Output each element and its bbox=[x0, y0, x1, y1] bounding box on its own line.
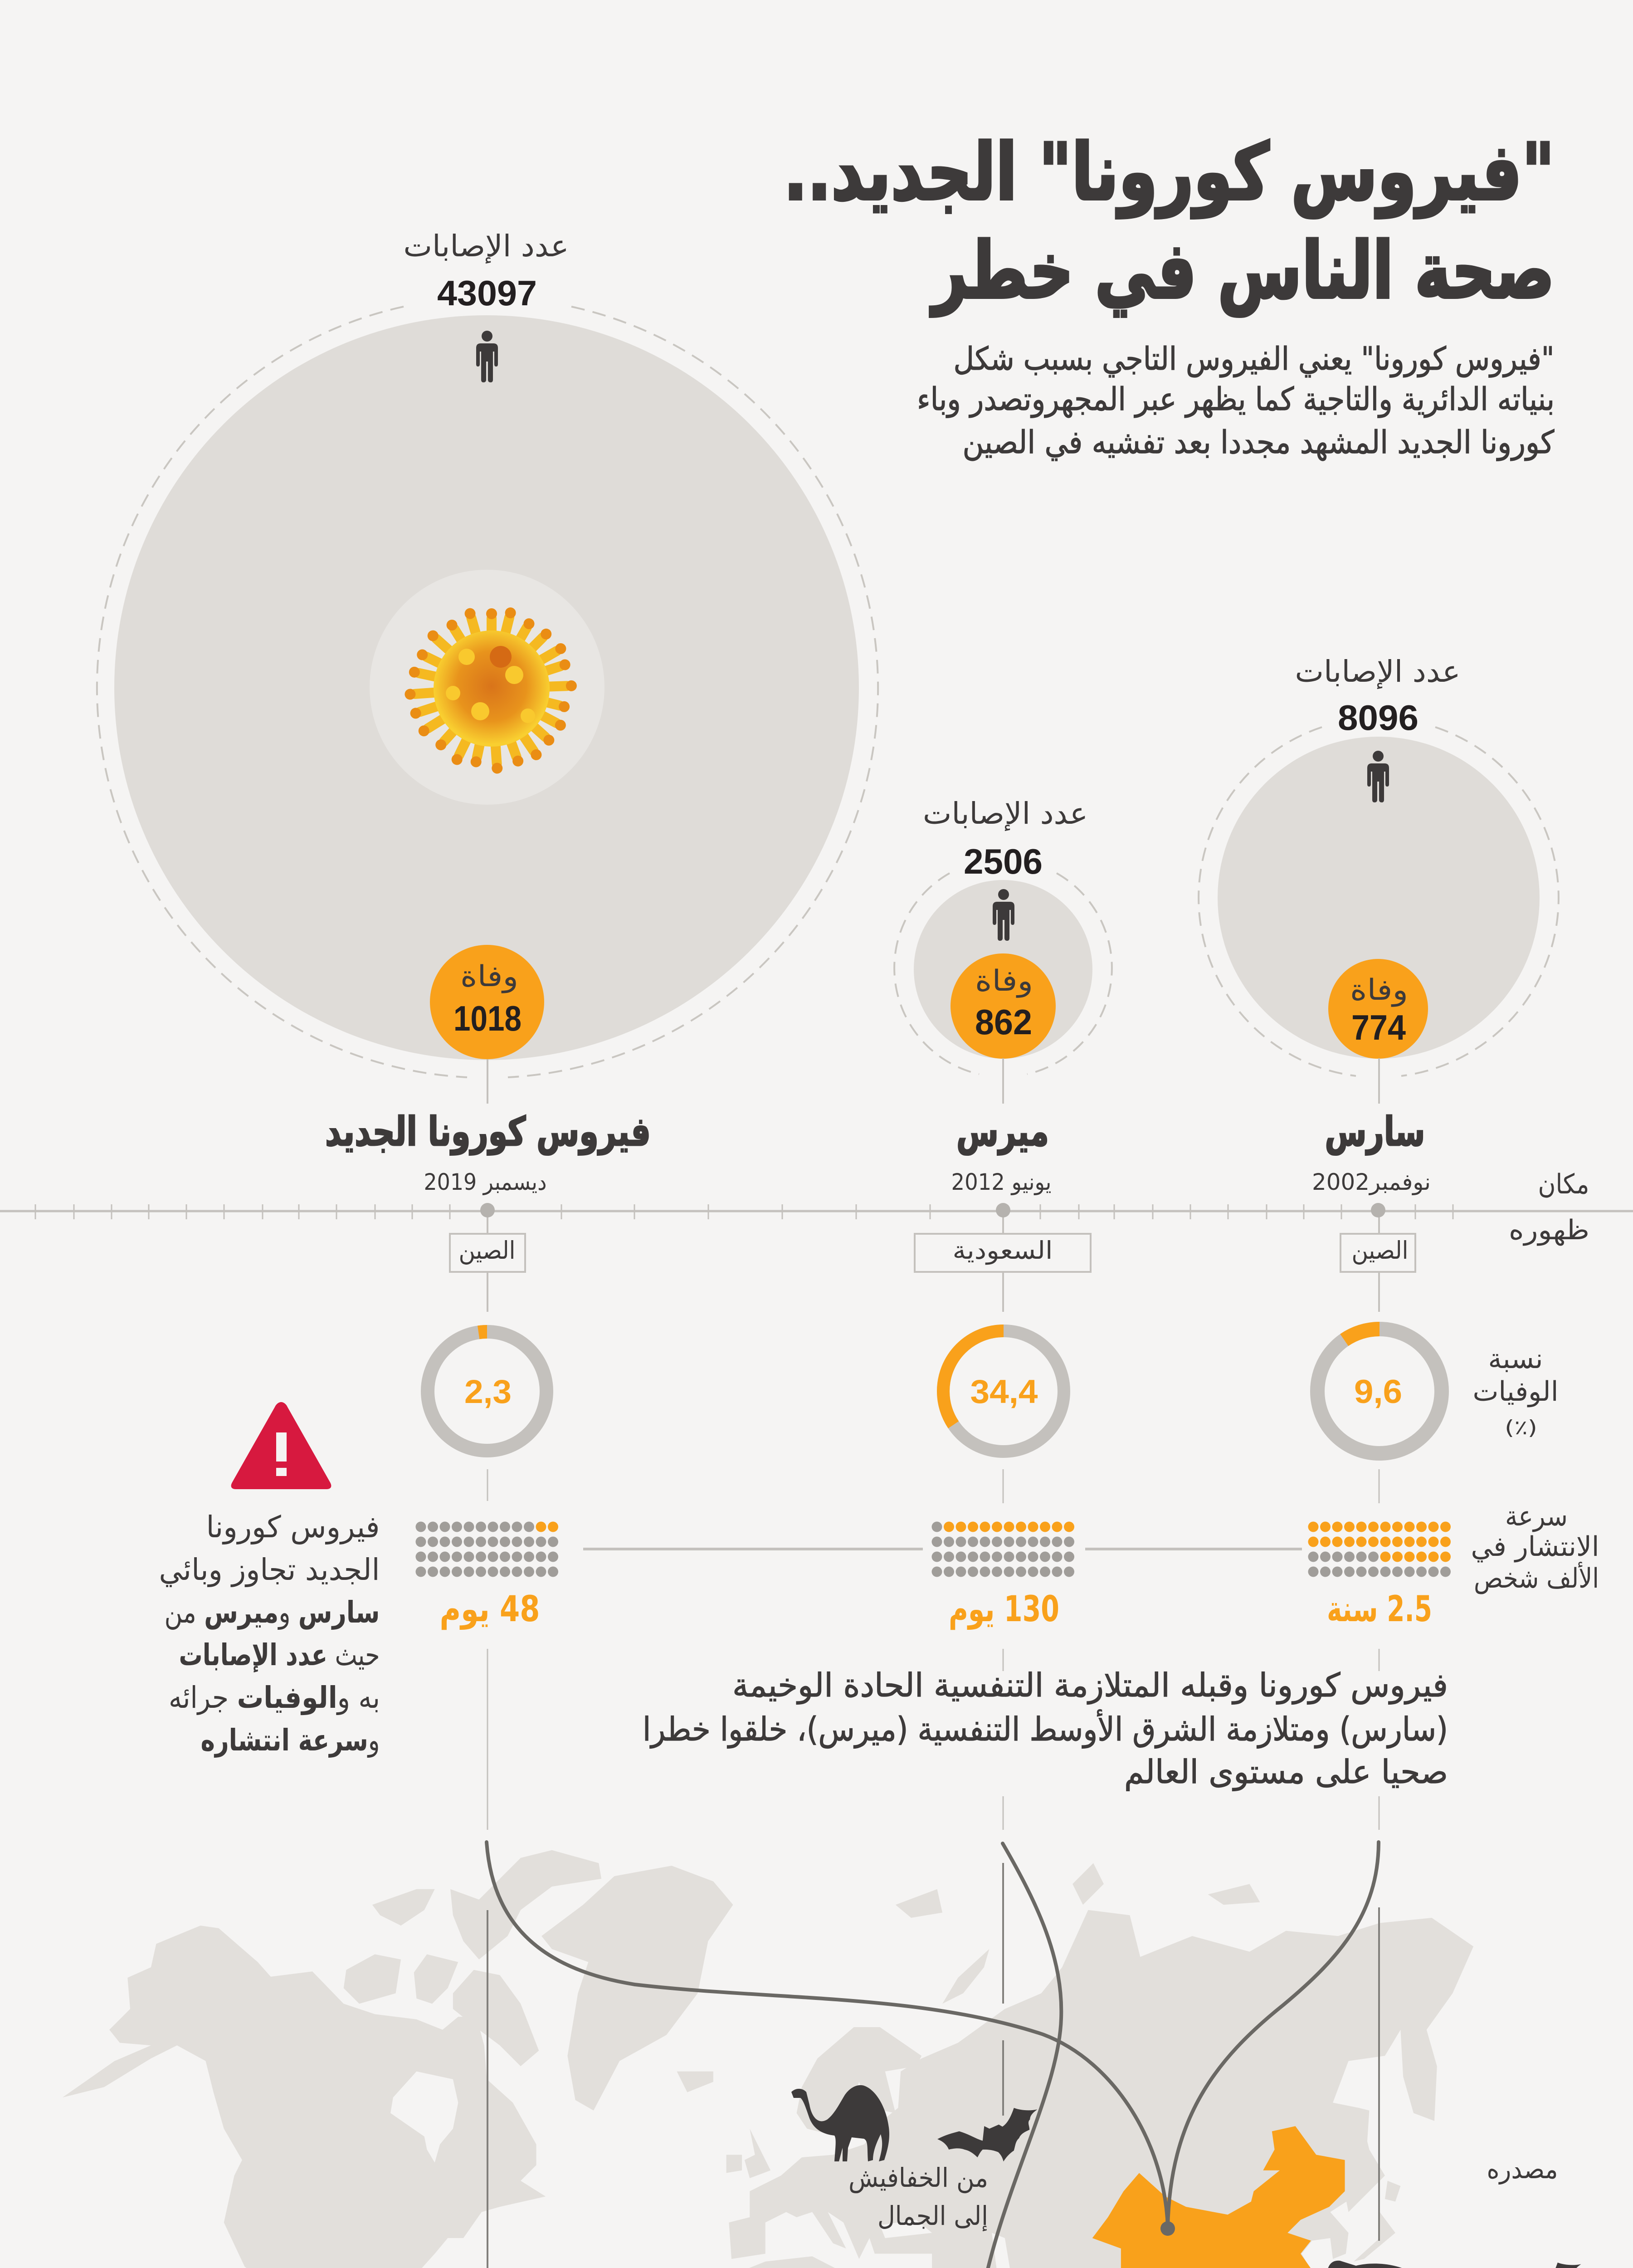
vertical guide lines over map bbox=[487, 1863, 1379, 2268]
number: infections: 2506 bbox=[964, 841, 1043, 881]
virus names: سارس bbox=[1325, 1108, 1425, 1155]
label: bats to camels: إلى الجمال bbox=[877, 2200, 988, 2232]
warning text: سارس وميرس من bbox=[164, 1595, 380, 1630]
icon: camel bbox=[791, 2085, 889, 2161]
icon: person bbox=[1367, 751, 1389, 802]
main paragraph bbox=[643, 1666, 1448, 1791]
infected area circle bbox=[114, 315, 859, 1060]
row label: fatality rate: (٪) bbox=[1505, 1416, 1537, 1439]
map: North America bbox=[63, 1926, 546, 2268]
country box: Saudi Arabia: السعودية bbox=[952, 1236, 1053, 1265]
infected area circle bbox=[1218, 737, 1540, 1059]
country box: China (new coronavirus) bbox=[450, 1234, 525, 1272]
label: bats to camels bbox=[848, 2162, 988, 2232]
number: infections: 43097 bbox=[437, 273, 537, 313]
map: Iceland and Caribbean bbox=[388, 2072, 713, 2268]
map: inland waters bbox=[390, 2072, 1010, 2268]
donut: fatality 34,4 bbox=[943, 1331, 1064, 1452]
warning text: فيروس كورونا bbox=[206, 1510, 380, 1545]
spread speed values: 130 يوم bbox=[949, 1589, 1059, 1630]
label: infections: عدد الإصابات bbox=[1295, 654, 1460, 689]
label: infections: عدد الإصابات bbox=[404, 229, 569, 264]
warning text: به والوفيات جرائه bbox=[169, 1680, 380, 1716]
intro paragraph: بنياته الدائرية والتاجية كما يظهر عبر المجهروتصدر وباء bbox=[917, 381, 1555, 418]
country box: China (SARS): الصين bbox=[1351, 1236, 1409, 1265]
main paragraph: صحيا على مستوى العالم bbox=[1124, 1753, 1448, 1791]
spread speed values bbox=[440, 1589, 1432, 1630]
deaths badge: 774 bbox=[1351, 1007, 1406, 1047]
row label: spread speed: سرعة bbox=[1505, 1501, 1568, 1532]
inner light circle bbox=[370, 570, 604, 805]
map: Greenland bbox=[541, 1866, 733, 2111]
virus names: ميرس bbox=[956, 1108, 1049, 1155]
world map bbox=[63, 1850, 1562, 2268]
map: Africa bbox=[692, 2256, 1002, 2268]
dot grid: MERS bbox=[931, 1521, 1074, 1577]
row label: place of emergence bbox=[1509, 1168, 1589, 1246]
map: Japan and Sakhalin bbox=[1354, 2108, 1400, 2262]
dates: ديسمبر 2019 bbox=[424, 1169, 547, 1195]
curve: new coronavirus to China bbox=[487, 1842, 1168, 2228]
icon: warning triangle bbox=[231, 1402, 331, 1489]
map: northern islands bbox=[896, 1863, 1260, 2004]
row label: spread speed: الألف شخص bbox=[1474, 1562, 1599, 1594]
panel: SARS circle bbox=[1199, 654, 1559, 1076]
dashed ring bbox=[1199, 727, 1559, 1076]
deaths badge: وفاة bbox=[460, 960, 518, 993]
number: infections: 8096 bbox=[1338, 698, 1419, 738]
dates bbox=[424, 1169, 1431, 1195]
map: Scandinavia bbox=[797, 2027, 921, 2134]
icon: person bbox=[476, 331, 498, 382]
panel: MERS circle bbox=[894, 796, 1112, 1074]
row label: fatality rate bbox=[1473, 1343, 1558, 1439]
donut: fatality 2,3 bbox=[428, 1332, 546, 1451]
map: Arctic islands bbox=[344, 1850, 601, 2066]
map: China highlighted bbox=[1092, 2126, 1345, 2268]
timeline bbox=[0, 1203, 1633, 1219]
icon: bat (camel source) bbox=[937, 2108, 1037, 2161]
deaths badge bbox=[430, 945, 544, 1059]
row label: place of emergence: مكان bbox=[1538, 1168, 1589, 1200]
deaths badge: 862 bbox=[975, 1002, 1032, 1042]
label: source row: مصدره bbox=[1487, 2154, 1558, 2185]
donut: fatality 9,6: 9,6 bbox=[1354, 1374, 1402, 1410]
intro paragraph: كورونا الجديد المشهد مجددا بعد تفشيه في الصين bbox=[962, 424, 1555, 461]
deaths badge: وفاة bbox=[975, 964, 1033, 998]
dates: يونيو 2012 bbox=[951, 1169, 1051, 1195]
title bbox=[784, 127, 1555, 317]
deaths badge: 1018 bbox=[453, 998, 522, 1038]
country box: Saudi Arabia bbox=[915, 1234, 1091, 1272]
map: British Isles bbox=[726, 2129, 770, 2178]
map: Eurasia bbox=[729, 1910, 1473, 2268]
label: infections: عدد الإصابات bbox=[923, 796, 1088, 831]
donut: fatality 34,4: 34,4 bbox=[970, 1374, 1038, 1410]
dates: نوفمبر2002 bbox=[1312, 1169, 1431, 1195]
label: bats to camels: من الخفافيش bbox=[848, 2162, 988, 2194]
warning text: الجديد تجاوز وبائي bbox=[159, 1552, 380, 1587]
row label: spread speed bbox=[1471, 1501, 1599, 1594]
country box: China (new coronavirus): الصين bbox=[459, 1236, 515, 1265]
warning text bbox=[159, 1510, 380, 1758]
virus names: فيروس كورونا الجديد bbox=[325, 1108, 651, 1155]
curve: SARS to China bbox=[1168, 1842, 1379, 2228]
icon: virus bbox=[405, 606, 577, 774]
infected area circle bbox=[914, 880, 1092, 1059]
row label: spread speed: الانتشار في bbox=[1471, 1531, 1599, 1563]
warning text: وسرعة انتشاره bbox=[200, 1723, 380, 1758]
column connector lines bbox=[487, 1058, 1379, 1830]
main paragraph: (سارس) ومتلازمة الشرق الأوسط التنفسية (ميرس)، خلقوا خطرا bbox=[643, 1709, 1448, 1749]
warning text: حيث عدد الإصابات bbox=[179, 1637, 380, 1673]
spread speed values: 2.5 سنة bbox=[1327, 1589, 1432, 1630]
icon: person bbox=[993, 889, 1014, 941]
row label: place of emergence: ظهوره bbox=[1509, 1214, 1589, 1246]
dot grid connector lines bbox=[583, 1548, 1302, 1550]
marker: China bbox=[1160, 2221, 1175, 2236]
main paragraph: فيروس كورونا وقبله المتلازمة التنفسية الحادة الوخيمة bbox=[732, 1666, 1448, 1705]
deaths badge: وفاة bbox=[1350, 973, 1408, 1007]
donut: fatality 9,6 bbox=[1317, 1329, 1442, 1453]
virus names bbox=[325, 1108, 1425, 1155]
panel: new coronavirus circle bbox=[97, 229, 878, 1077]
intro paragraph: "فيروس كورونا" يعني الفيروس التاجي بسبب شكل bbox=[953, 340, 1555, 378]
icon: bat (civet source) bbox=[1481, 2263, 1581, 2268]
icon: civet bbox=[1326, 2261, 1436, 2268]
row label: fatality rate: الوفيات bbox=[1473, 1376, 1558, 1408]
intro paragraph bbox=[917, 340, 1555, 461]
country box: China (SARS) bbox=[1341, 1234, 1415, 1272]
dashed ring bbox=[97, 307, 878, 1077]
donut: fatality 2,3: 2,3 bbox=[464, 1374, 512, 1410]
row label: fatality rate: نسبة bbox=[1488, 1343, 1543, 1375]
spread speed values: 48 يوم bbox=[440, 1589, 540, 1630]
dot grid: new coronavirus bbox=[415, 1521, 558, 1577]
deaths badge bbox=[951, 953, 1056, 1059]
dashed ring bbox=[894, 873, 1112, 1074]
dot grid: SARS bbox=[1308, 1521, 1451, 1577]
deaths badge bbox=[1328, 959, 1428, 1059]
curve: MERS to Saudi Arabia bbox=[978, 1843, 1061, 2268]
